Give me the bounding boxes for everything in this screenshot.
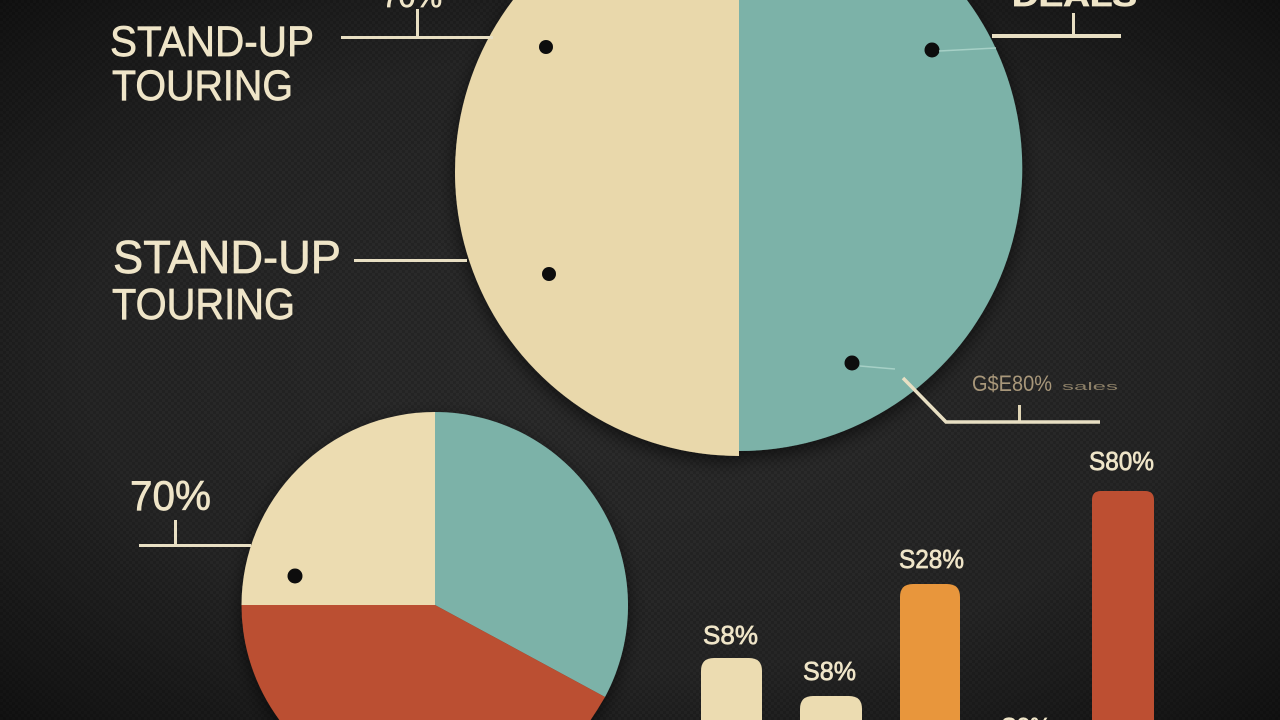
bar: red: S80%	[1089, 446, 1154, 476]
label: stand-up touring upper: TOURING	[112, 62, 293, 110]
leader line: lower stand-up touring	[354, 259, 467, 262]
bar: cream 2	[800, 656, 862, 720]
callout: deals	[939, 0, 1137, 51]
pie slice: teal	[435, 412, 628, 697]
bar: orange: S28%	[899, 544, 964, 574]
callout: lower right garbled label: G$E80%	[972, 371, 1052, 396]
callout: top clipped percentage	[341, 0, 493, 39]
small pie chart	[242, 412, 628, 720]
callout: lower right garbled label: sales	[1062, 381, 1119, 393]
callout: 70%	[130, 472, 251, 547]
marker dots on large pie	[539, 40, 940, 370]
label: stand-up touring lower: TOURING	[112, 280, 295, 329]
callout: lower right garbled label	[860, 366, 1119, 422]
pie slice: teal half	[739, 0, 1022, 451]
bar: orange	[899, 544, 964, 720]
bar: cream 1: S8%	[703, 620, 758, 650]
label: stand-up touring upper: STAND-UP	[110, 18, 314, 66]
pie slice: red	[242, 605, 605, 720]
pie slice: cream half	[455, 0, 739, 456]
label: stand-up touring upper	[110, 18, 314, 110]
pie slice: cream	[242, 412, 435, 605]
large pie chart	[455, 0, 1022, 456]
bar: cream 2: S8%	[803, 656, 856, 686]
bar: cream 1	[701, 620, 762, 720]
bar chart	[701, 446, 1154, 720]
bar: red	[1089, 446, 1154, 720]
callout: 70%: 70%	[130, 472, 211, 519]
label: stand-up touring lower	[112, 231, 341, 329]
label: stand-up touring lower: STAND-UP	[113, 231, 341, 283]
marker dot on small pie	[288, 568, 302, 584]
